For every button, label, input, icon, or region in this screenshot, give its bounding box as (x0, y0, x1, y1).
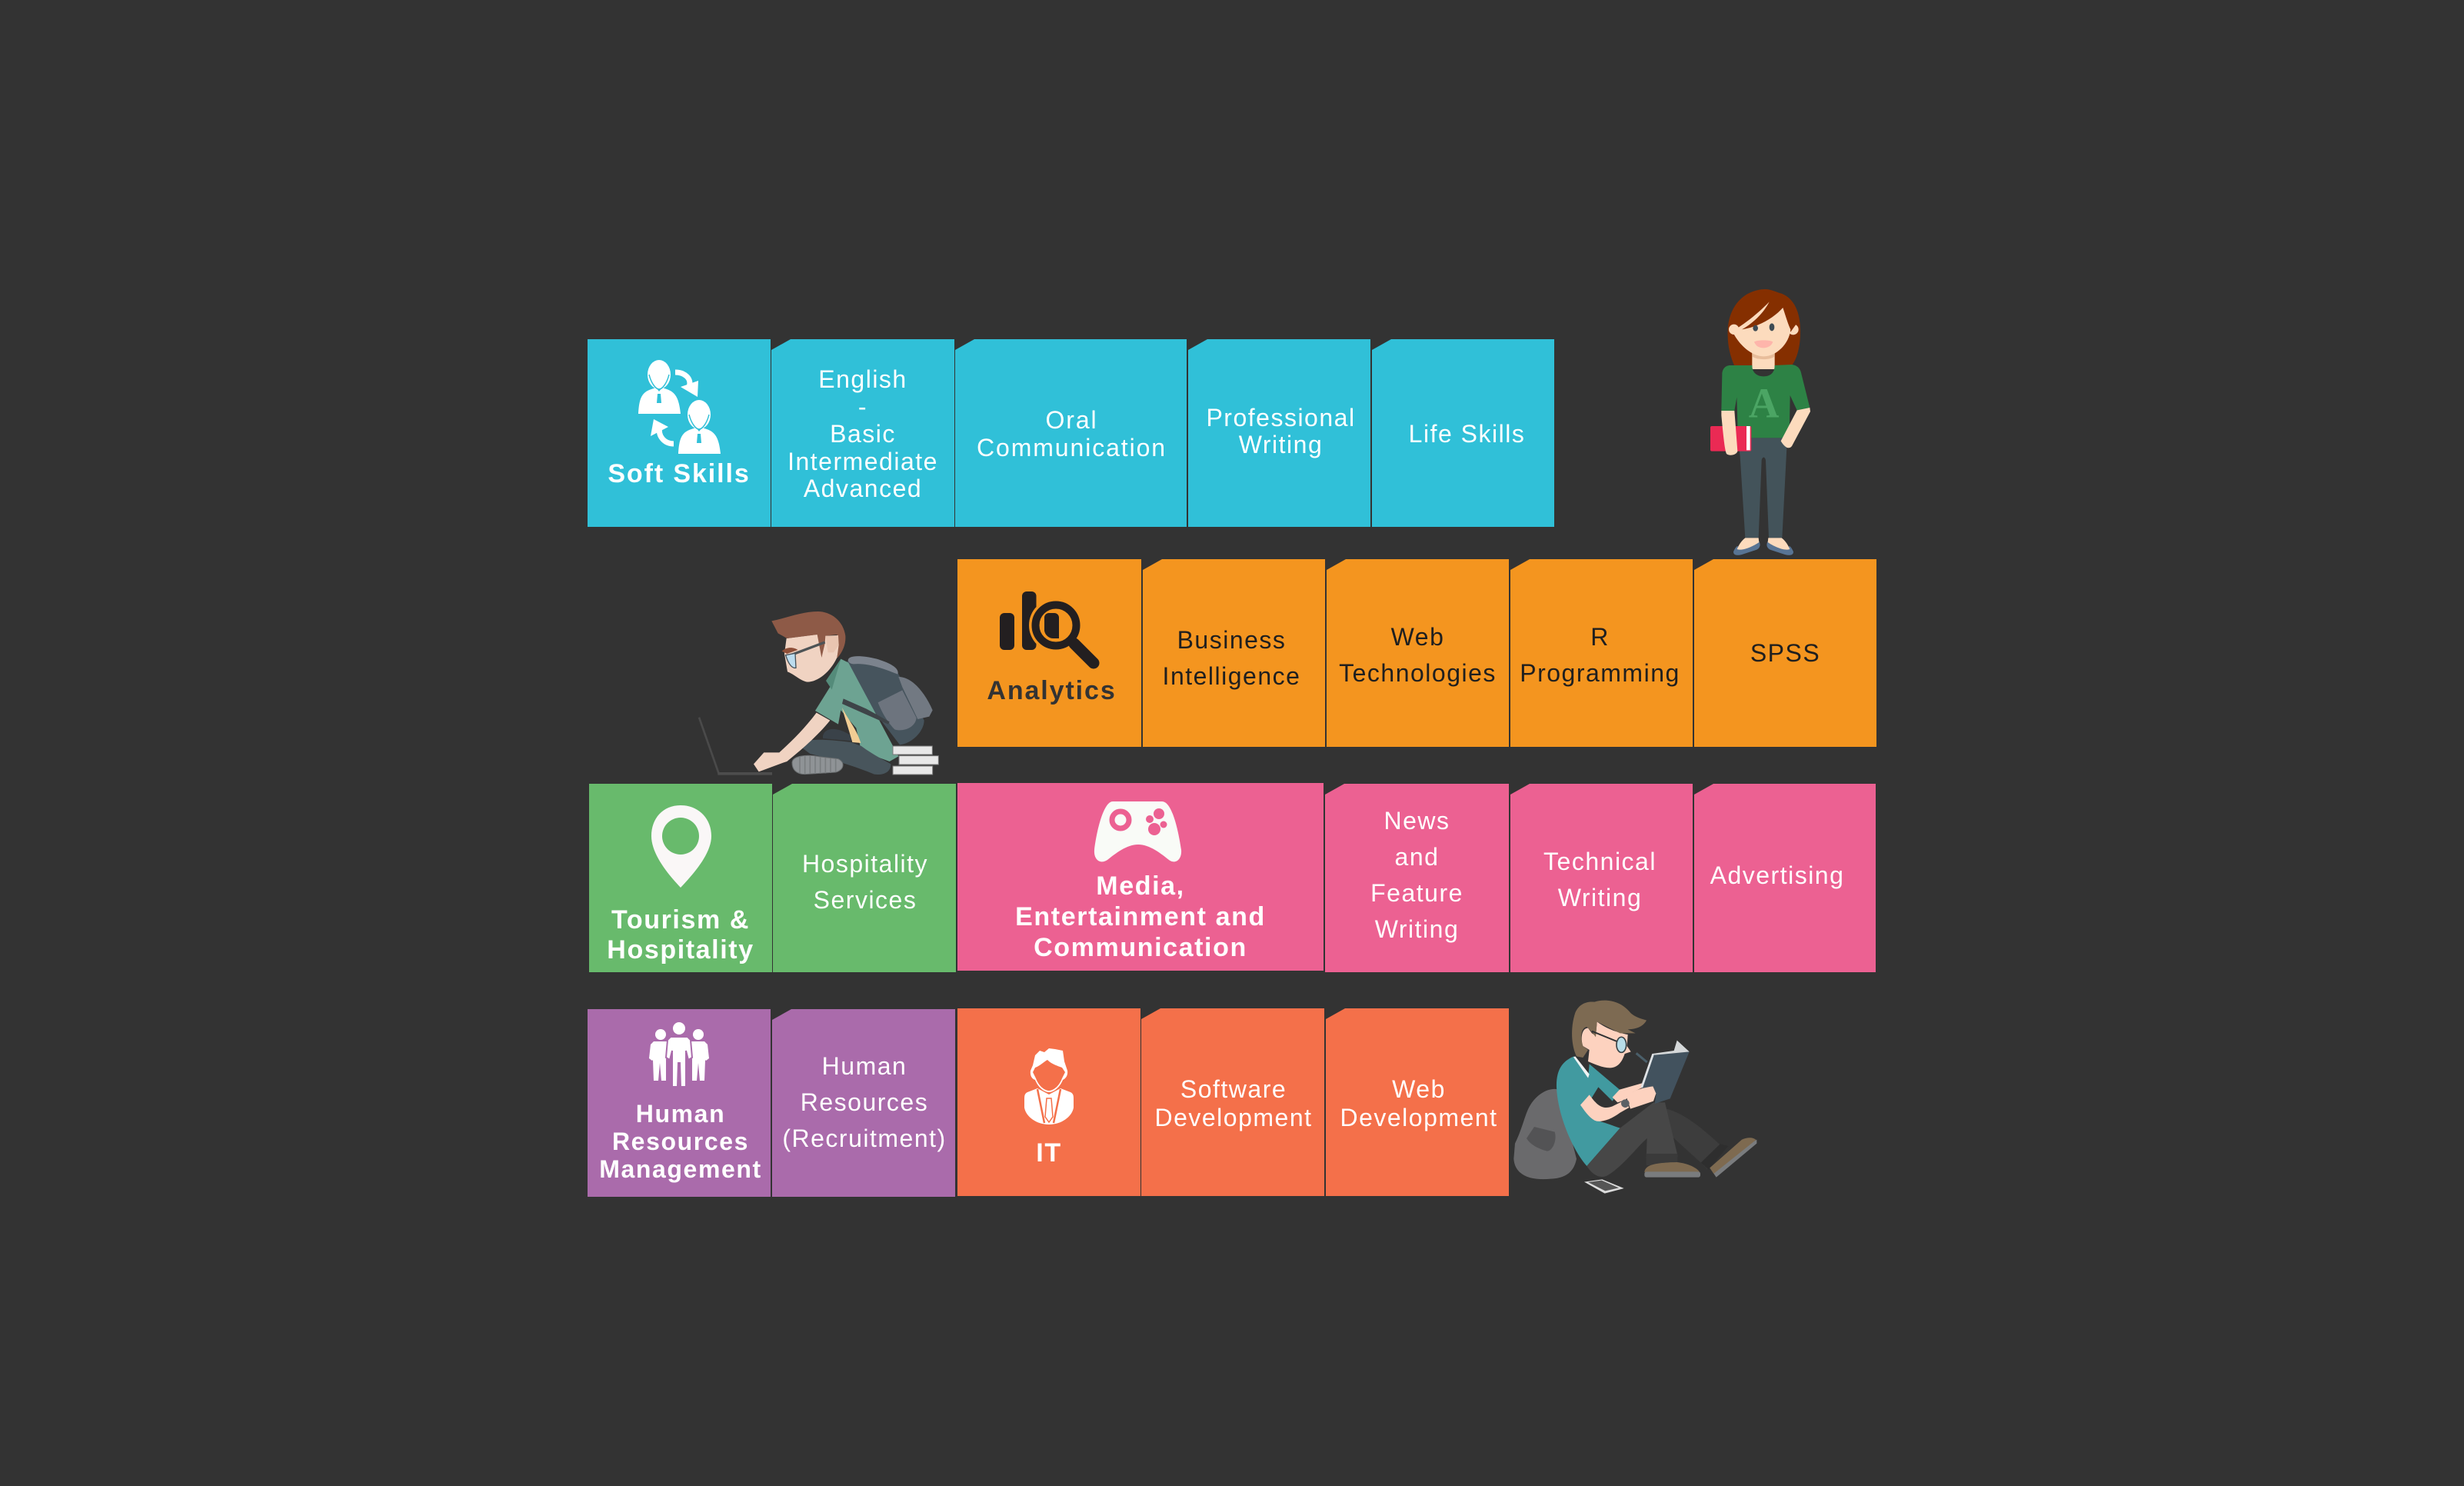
text: Human Resources (Recruitment) (784, 1057, 944, 1152)
text: Hospitality Services: Hospitality (802, 850, 928, 878)
illustration: boy with laptop and backpack (699, 611, 938, 775)
panel: Life Skills (1372, 339, 1554, 527)
text: English levels: - (858, 392, 867, 420)
panel: Web Technologies (1327, 559, 1509, 747)
text: Software Development (1157, 1080, 1311, 1131)
text: News and Feature Writing: News (1384, 807, 1450, 835)
illustration: girl standing with book (1710, 289, 1810, 555)
heading: Tourism & Hospitality: Hospitality (607, 935, 754, 965)
text: Web Technologies: Technologies (1339, 659, 1497, 687)
text: Web Development: Web (1392, 1075, 1446, 1103)
panel: News and Feature Writing (1325, 784, 1509, 972)
panel: Media header (957, 783, 1324, 971)
text: Business Intelligence: Intelligence (1163, 662, 1300, 690)
illustration: boy reading a book against backpack (1513, 1001, 1756, 1194)
heading: Human Resources Management: Human (636, 1100, 725, 1128)
text: Professional Writing: Writing (1239, 431, 1323, 458)
text: Human Resources (Recruitment): Human (822, 1052, 907, 1080)
text: Technical Writing (1544, 852, 1653, 911)
panel: Technical Writing (1510, 784, 1693, 972)
text: Technical Writing: Technical (1543, 848, 1657, 875)
heading: Human Resources Management (599, 1100, 762, 1183)
panel: Hospitality Services (773, 784, 956, 972)
heading: Media, Entertainment and Communication: Communication (1034, 933, 1247, 962)
text: Web Development (1342, 1080, 1497, 1131)
icon: IT professional (1024, 1048, 1074, 1124)
text: Advertising: Advertising (1710, 861, 1844, 889)
heading: Human Resources Management: Management (599, 1155, 762, 1183)
text: Business Intelligence: Business (1177, 626, 1286, 654)
text: Human Resources (Recruitment): Resources (801, 1088, 928, 1116)
text: Professional Writing: Professional (1206, 404, 1356, 431)
panel: IT header (957, 1008, 1140, 1196)
panel: Human Resources (Recruitment) (772, 1009, 955, 1197)
text: R Programming: R (1590, 623, 1610, 651)
text: Software Development: Development (1154, 1104, 1313, 1131)
text: Business Intelligence (1164, 631, 1298, 689)
text: Oral Communication: Oral (1045, 406, 1098, 434)
text: English levels: Basic (830, 420, 896, 448)
text: News and Feature Writing: and (1395, 843, 1439, 871)
text: News and Feature Writing (1372, 812, 1461, 943)
heading: Human Resources Management: Resources (612, 1128, 749, 1155)
heading: IT: IT (1036, 1138, 1062, 1168)
text: Hospitality Services (804, 854, 927, 909)
text: Web Technologies (1340, 628, 1495, 686)
icon: analytics magnifier over bars (1000, 591, 1094, 663)
text: Professional Writing (1208, 408, 1353, 458)
panel: English (771, 339, 954, 527)
text: English levels: Advanced (804, 475, 922, 502)
text: R Programming: Programming (1520, 659, 1680, 687)
panel: R Programming (1510, 559, 1693, 747)
heading: Media, Entertainment and Communication (1015, 871, 1266, 962)
text: English levels (790, 369, 936, 497)
text: English levels: English (818, 365, 907, 393)
text: Life Skills: Life Skills (1409, 420, 1525, 448)
illustration: girl standing with book: A (1749, 380, 1780, 427)
icon: game controller (1094, 801, 1181, 861)
panel: Web Development (1326, 1008, 1509, 1196)
panel: Business Intelligence (1143, 559, 1325, 747)
panel: Professional Writing (1188, 339, 1370, 527)
text: Human Resources (Recruitment): (Recruitment) (782, 1124, 947, 1152)
panel: Oral Communication (955, 339, 1187, 527)
panel: Software Development (1141, 1008, 1324, 1196)
text: Technical Writing: Writing (1558, 884, 1642, 911)
text: Software Development: Software (1180, 1075, 1287, 1103)
text: English levels: Intermediate (787, 448, 938, 475)
text: News and Feature Writing: Feature (1370, 879, 1463, 907)
heading: Media, Entertainment and Communication: Media, (1096, 871, 1185, 901)
panel: Advertising (1694, 784, 1876, 972)
heading: Analytics: Analytics (987, 676, 1117, 705)
heading: Tourism & Hospitality (607, 905, 754, 965)
panel: Tourism and Hospitality header (589, 784, 772, 972)
text: Hospitality Services: Services (814, 886, 917, 914)
panel: Soft Skills header (588, 339, 771, 527)
text: R Programming (1521, 628, 1678, 686)
panel: Human Resources Management header (588, 1009, 771, 1197)
icon: team of three people (649, 1022, 709, 1087)
icon: map pin (651, 805, 711, 888)
text: SPSS: SPSS (1750, 639, 1820, 667)
text: News and Feature Writing: Writing (1375, 915, 1459, 943)
text: Web Technologies: Web (1391, 623, 1444, 651)
heading: Soft Skills: Soft Skills (608, 459, 751, 488)
icon: soft skills people exchange (638, 360, 721, 454)
panel: SPSS (1694, 559, 1876, 747)
text: Oral Communication: Communication (977, 434, 1167, 461)
panel: Analytics header (957, 559, 1141, 747)
heading: Tourism & Hospitality: Tourism & (611, 905, 750, 935)
text: Web Development: Development (1340, 1104, 1498, 1131)
heading: Media, Entertainment and Communication: Entertainment and (1015, 902, 1266, 931)
text: Oral Communication (978, 411, 1164, 457)
